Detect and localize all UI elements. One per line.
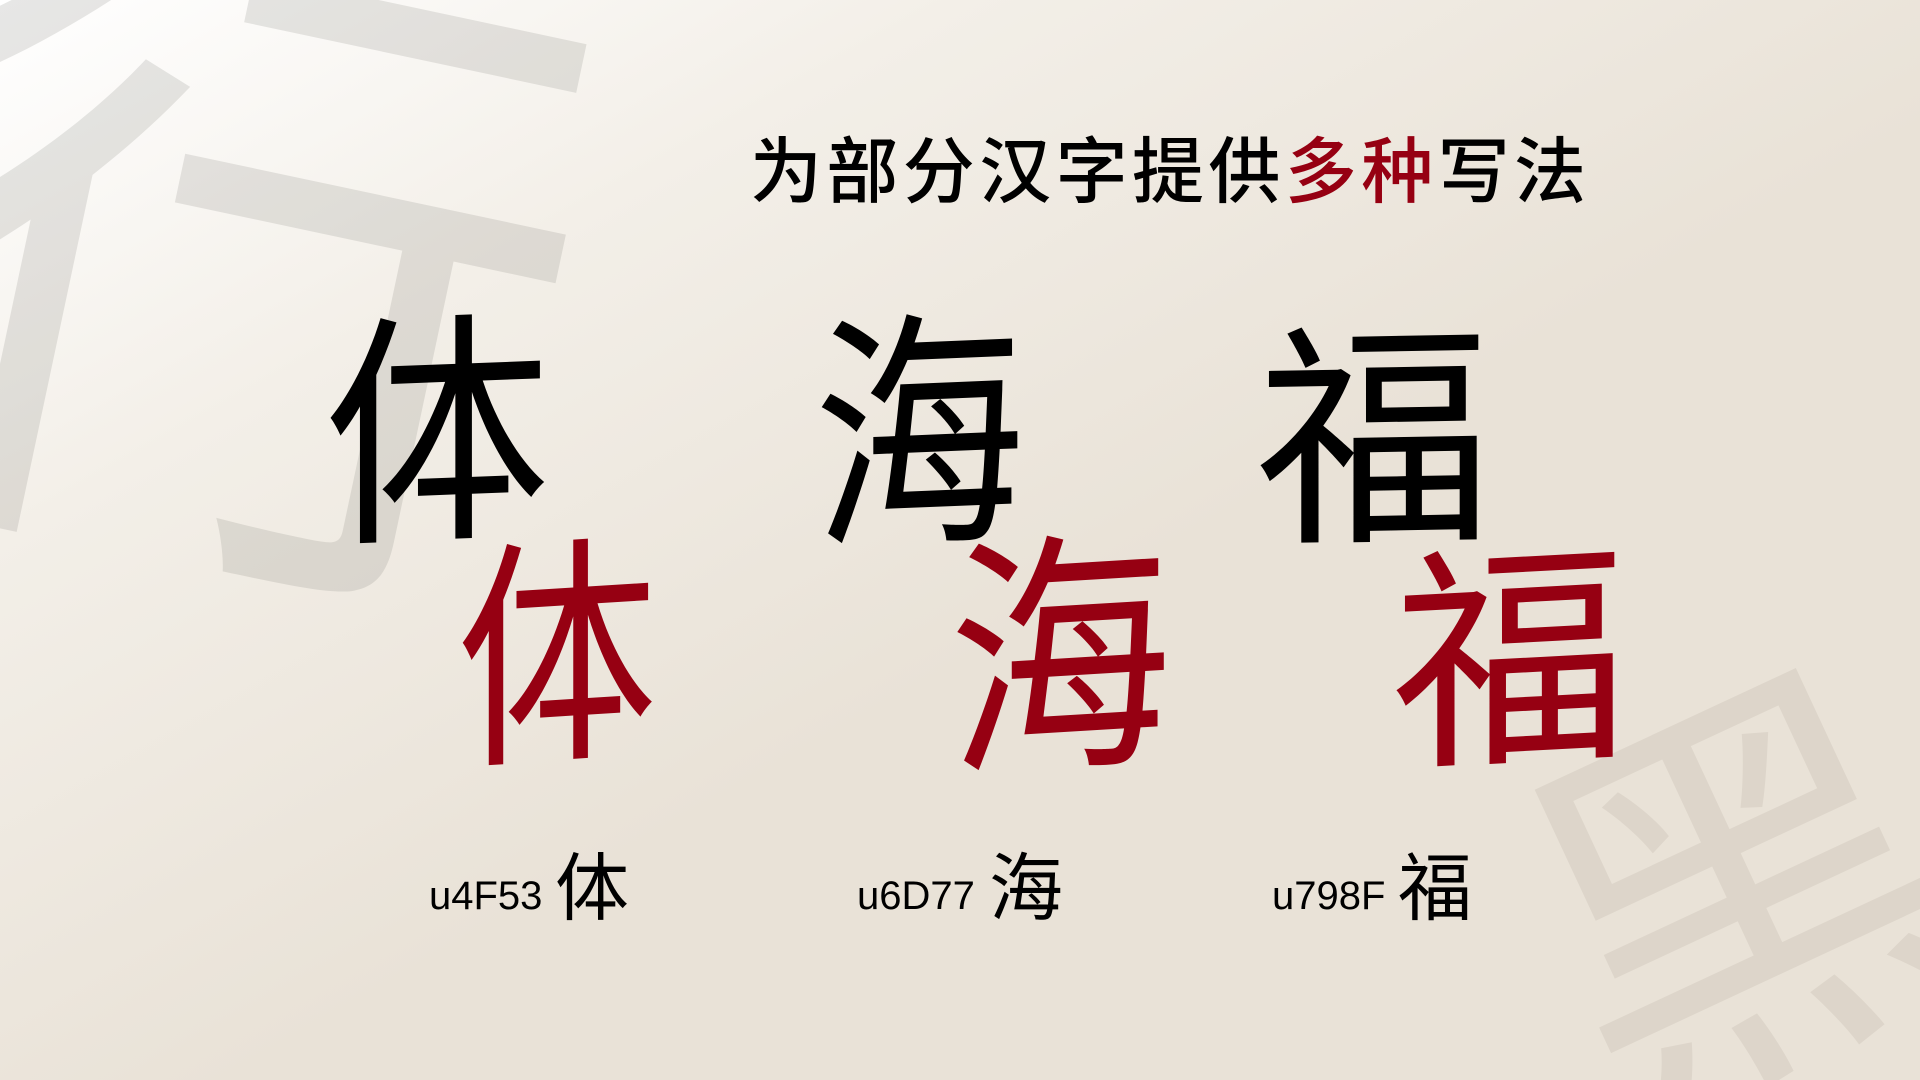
glyph: 福 alternate form: 福 [1392,464,1628,818]
glyph: 海 alternate form: 海 [948,447,1172,829]
glyph: 体 alternate form: 体 [457,456,657,818]
label: u6D77 海: u6D77 [857,874,975,918]
label: u6D77 海: 海 [989,829,1063,936]
label: u4F53 体 [429,829,629,936]
glyph: 福 default form: 福 [1256,247,1492,593]
label: u4F53 体: u4F53 [429,874,542,918]
glyph: 海 default form: 海 [813,229,1025,601]
title: 为部分汉字提供多种写法 [750,113,1590,218]
label: u798F 福: u798F [1272,874,1385,918]
label: u4F53 体: 体 [555,829,629,936]
label: u798F 福 [1272,829,1472,936]
label: u6D77 海 [857,829,1063,936]
label: u798F 福: 福 [1398,829,1472,936]
glyph: 体 default form: 体 [324,232,550,596]
